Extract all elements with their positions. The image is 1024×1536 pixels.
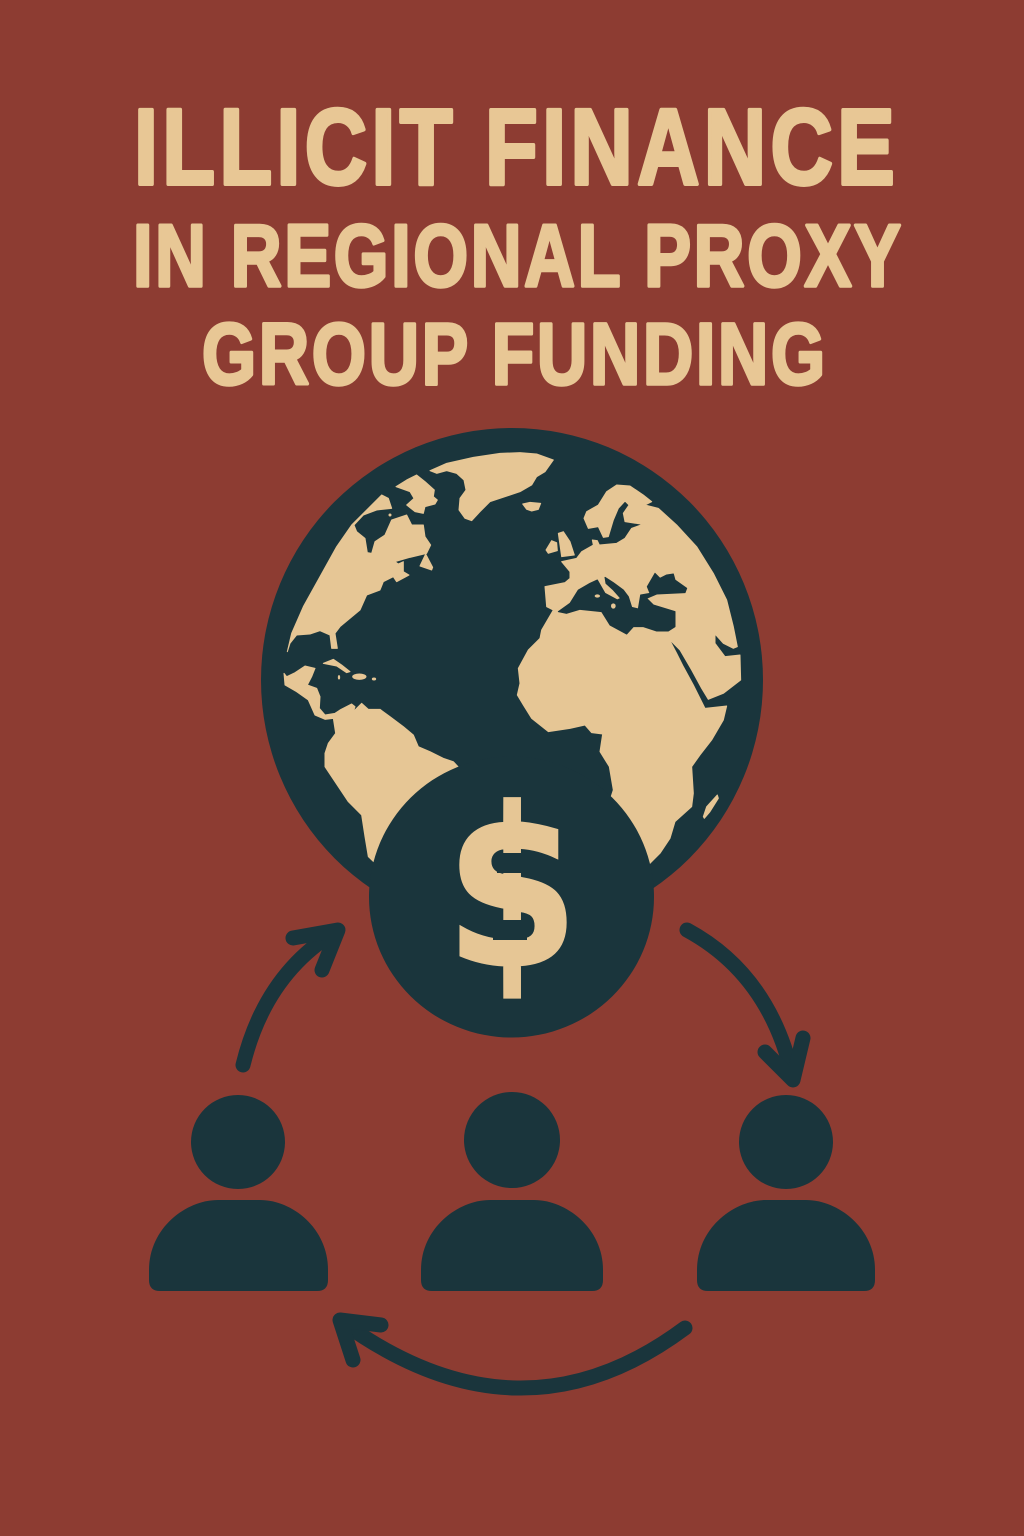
mediterranean islands: [595, 594, 616, 609]
arrow: left group to coin: [243, 930, 338, 1065]
land mass: [517, 485, 741, 864]
icon: dollar coin: [369, 756, 654, 1038]
central and south america: [284, 659, 462, 862]
icon: globe: [261, 428, 763, 932]
title: [133, 86, 901, 403]
arrow: coin to right group: [687, 930, 803, 1080]
dollar sign: $: [446, 762, 578, 1017]
title line 3: GROUP FUNDING: [202, 306, 825, 403]
eurasia and africa: [517, 485, 741, 864]
icon: person centre: [421, 1092, 603, 1291]
arrow: right group back to left group: [340, 1320, 685, 1388]
icon: person left: [149, 1095, 328, 1291]
title line 2: IN REGIONAL PROXY: [133, 206, 901, 305]
mediterranean and black sea: [558, 573, 687, 634]
americas and greenland: [287, 453, 553, 652]
icon: person right: [697, 1095, 875, 1291]
title line 1: ILLICIT FINANCE: [134, 86, 895, 207]
